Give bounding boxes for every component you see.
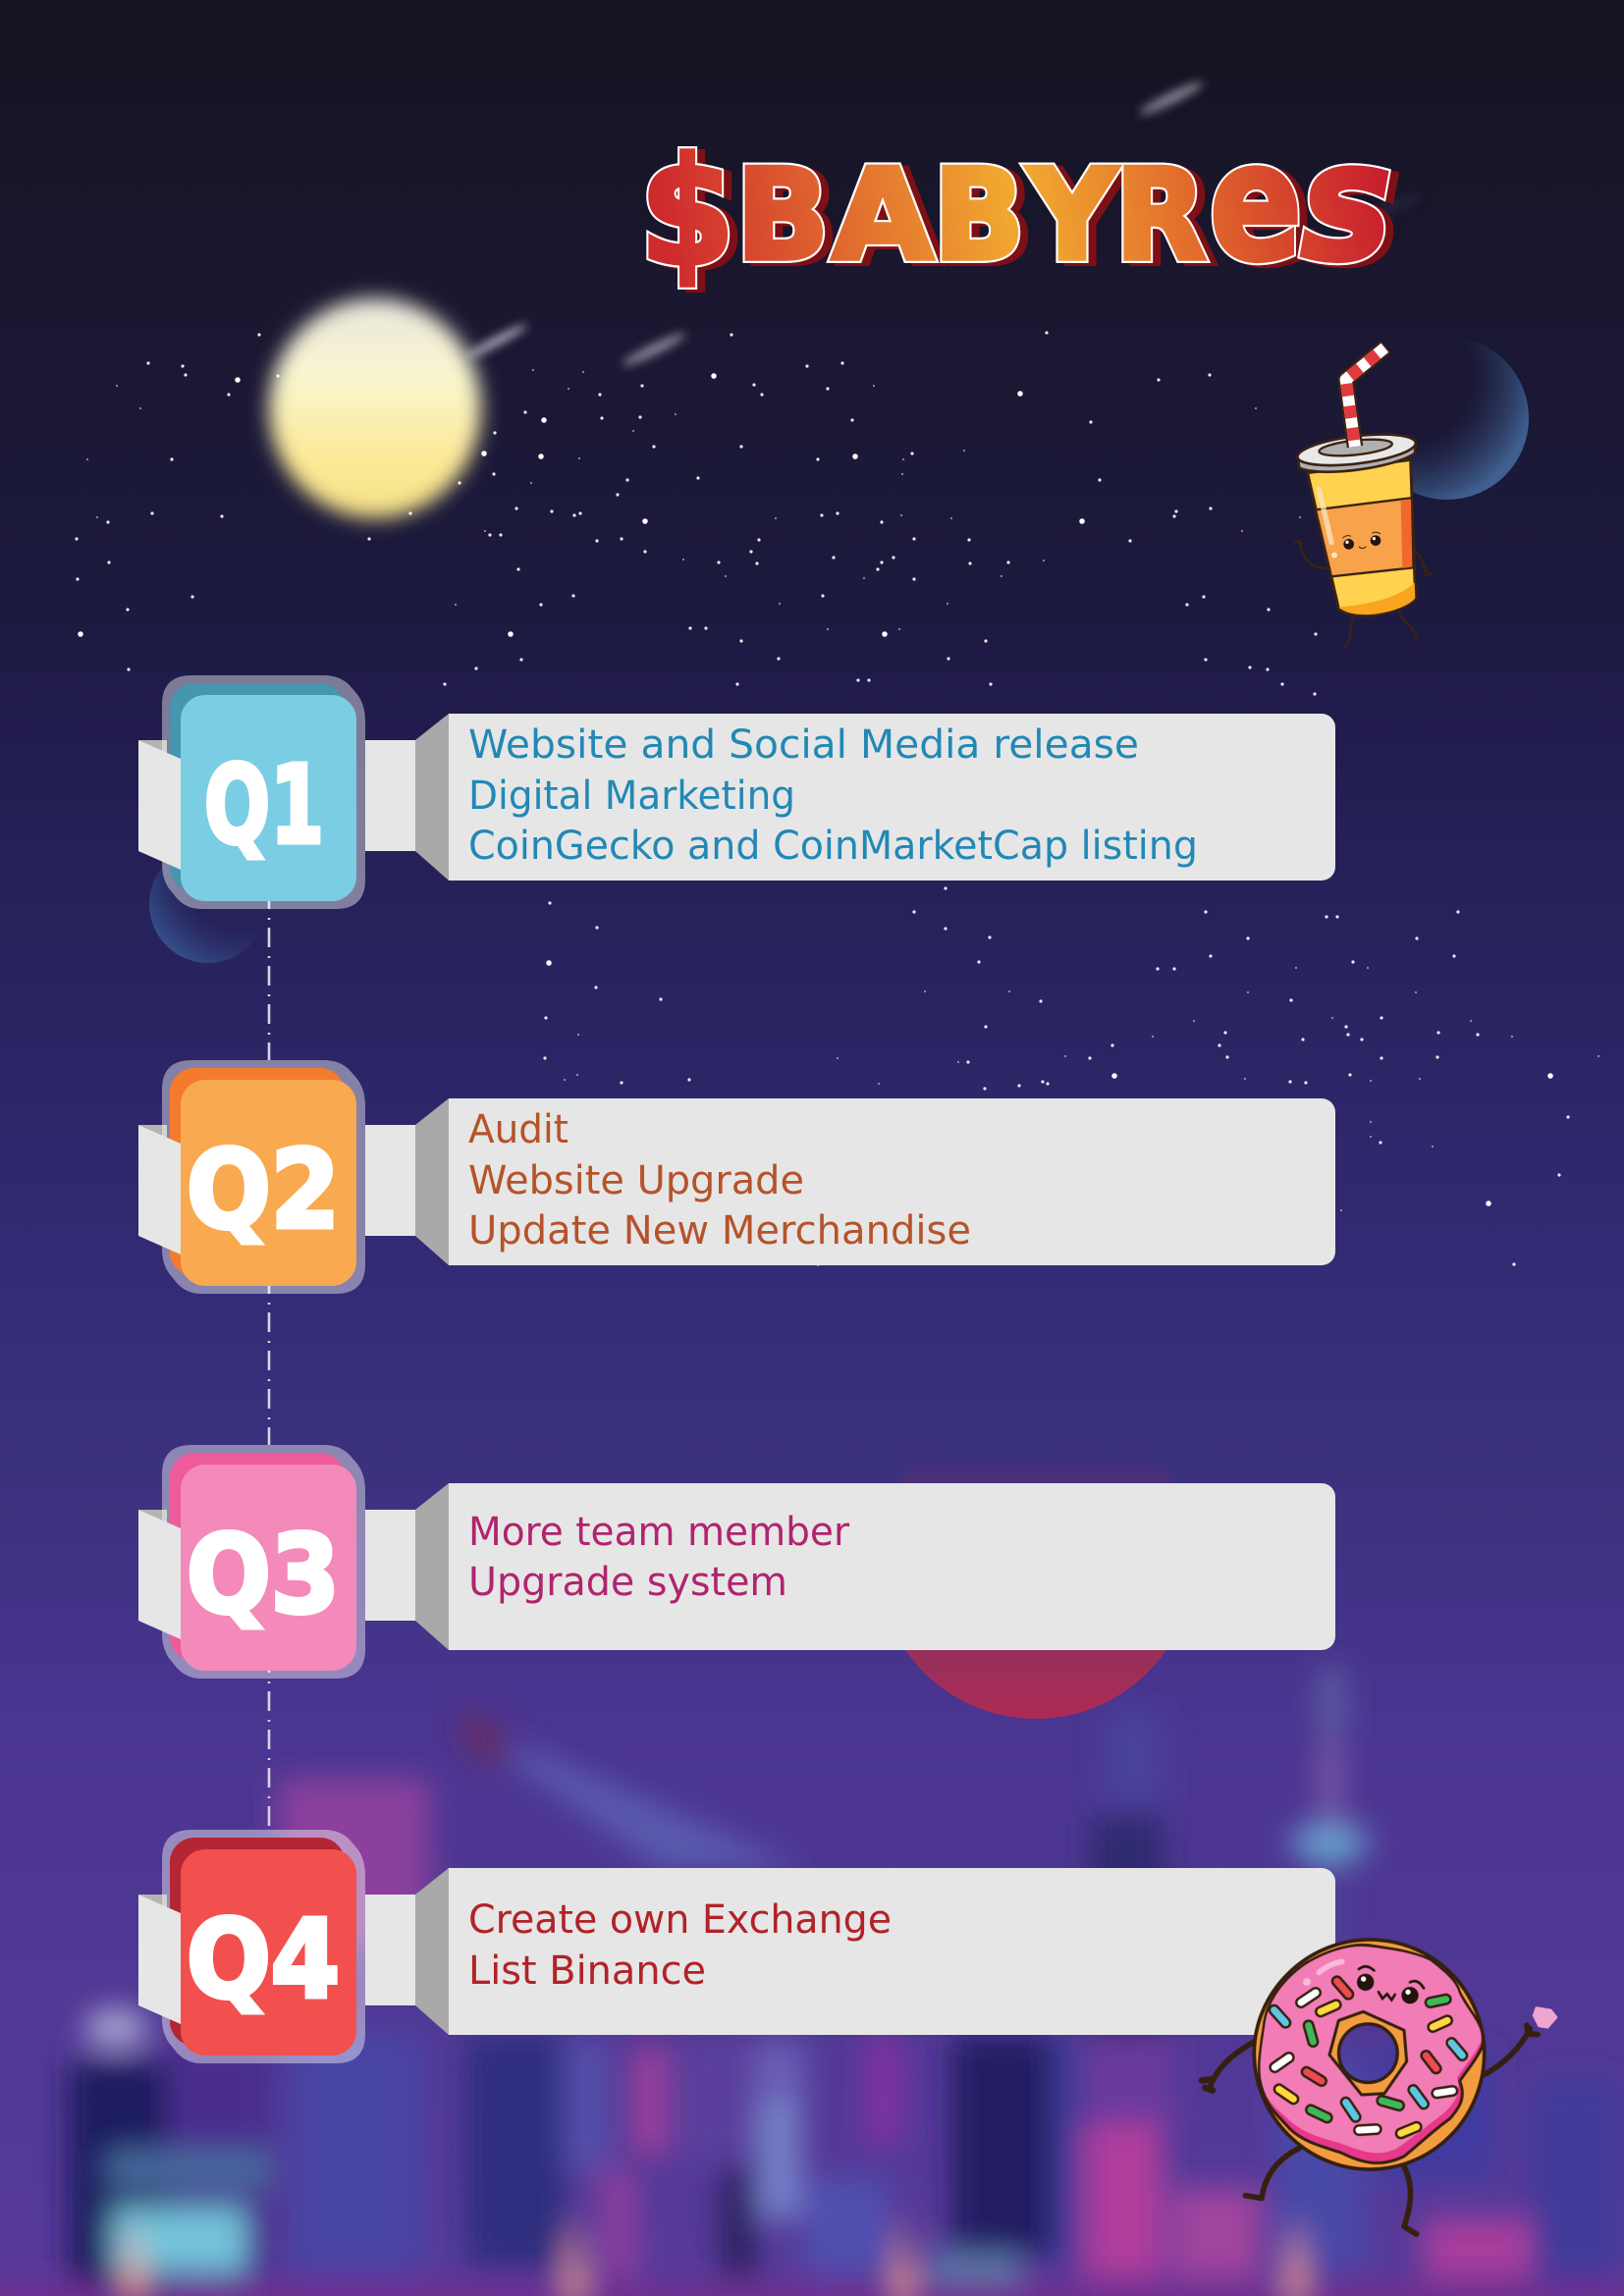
cup straw	[1346, 347, 1385, 447]
text Q3: More team member	[468, 1510, 850, 1555]
text Q1: CoinGecko and CoinMarketCap listing	[468, 824, 1198, 869]
left ribbon fold Q1	[138, 740, 167, 754]
text Q4	[468, 1897, 892, 1994]
tile border Q1	[162, 675, 365, 909]
cup side highlight	[1319, 489, 1331, 543]
donut icing shadow	[1259, 1945, 1483, 2163]
ribbon Q3	[138, 1510, 181, 1639]
text Q3: Upgrade system	[468, 1560, 787, 1605]
title gradient fill: R	[1115, 142, 1206, 288]
left ribbon fold Q2	[138, 1125, 167, 1139]
cup orange band	[1316, 498, 1413, 576]
donut hole rim	[1329, 2011, 1407, 2095]
title gradient fill: A	[833, 142, 933, 288]
tile back Q1	[170, 683, 345, 891]
text Q4: List Binance	[468, 1949, 706, 1994]
title white outline: B	[736, 142, 829, 288]
left ribbon fold Q3	[138, 1510, 167, 1523]
tile border Q2	[162, 1060, 365, 1294]
icon: drink cup mascot	[1295, 347, 1432, 647]
text Q1	[468, 722, 1198, 869]
donut face	[1303, 1961, 1424, 2003]
text Q2: Audit	[468, 1107, 568, 1152]
diamond	[1533, 2006, 1558, 2029]
moon	[269, 298, 481, 518]
cup bottom shade	[1338, 582, 1415, 614]
crescent planet right	[1366, 337, 1529, 500]
text Q1: Website and Social Media release	[468, 722, 1139, 768]
tile border Q3	[162, 1445, 365, 1679]
starfield	[77, 333, 1598, 1265]
text Q2	[468, 1107, 971, 1254]
tile front Q2	[181, 1080, 356, 1286]
title white outline: B	[934, 142, 1024, 288]
arrow connector Q1	[365, 714, 449, 881]
title white outline: $	[640, 128, 734, 298]
left ribbon fold Q4	[138, 1895, 167, 1908]
red planet behind Q3	[878, 1403, 1194, 1719]
cup band shade	[1401, 500, 1412, 568]
panel Q3	[449, 1483, 1335, 1650]
ribbon Q2	[138, 1125, 181, 1255]
crescent planet left	[149, 845, 267, 963]
tile back Q4	[170, 1838, 345, 2046]
icon: donut mascot	[1202, 1940, 1558, 2234]
connector line below Q1	[268, 901, 270, 1060]
cup body	[1308, 459, 1416, 615]
cup lid	[1298, 442, 1416, 472]
roadmap row Q4	[138, 1830, 1335, 2063]
arrow connector Q4	[365, 1868, 449, 2035]
title white outline: e	[1210, 109, 1302, 296]
title gradient fill: $	[640, 128, 734, 298]
title gradient fill: B	[934, 142, 1024, 288]
connector line below Q3	[268, 1671, 270, 1830]
arrow connector Q2	[365, 1098, 449, 1265]
title gradient fill: s	[1301, 109, 1391, 296]
title white outline: R	[1115, 142, 1206, 288]
title gradient fill	[640, 109, 1391, 298]
tile front Q3	[181, 1465, 356, 1671]
title white outline	[640, 109, 1391, 298]
connector line below Q2	[268, 1286, 270, 1445]
text Q3	[468, 1510, 850, 1605]
title gradient fill: Y	[1026, 142, 1118, 288]
cup arms and legs	[1295, 541, 1432, 647]
ribbon Q1	[138, 740, 181, 870]
text Q2: Update New Merchandise	[468, 1208, 971, 1254]
label Q2: Q2	[187, 1127, 340, 1253]
roadmap row Q2	[138, 1060, 1335, 1445]
arrow connector Q3	[365, 1483, 449, 1650]
meteor streaks	[462, 79, 1424, 369]
text Q4: Create own Exchange	[468, 1897, 892, 1943]
title gradient fill: B	[736, 142, 829, 288]
title	[640, 109, 1391, 298]
tile back Q2	[170, 1068, 345, 1276]
tile back Q3	[170, 1453, 345, 1661]
sprinkles	[1274, 1981, 1462, 2133]
title white outline: s	[1301, 109, 1391, 296]
title white outline: Y	[1026, 142, 1118, 288]
text Q1: Digital Marketing	[468, 774, 795, 819]
tile front Q1	[181, 695, 356, 901]
roadmap row Q1	[138, 675, 1335, 1060]
tile front Q4	[181, 1849, 356, 2056]
label Q4: Q4	[187, 1896, 340, 2022]
tile border Q4	[162, 1830, 365, 2063]
label Q1: Q1	[204, 742, 324, 868]
title white outline: A	[833, 142, 933, 288]
panel Q4	[449, 1868, 1335, 2035]
donut limbs	[1202, 2025, 1538, 2234]
donut base	[1254, 1940, 1485, 2169]
cup face	[1331, 532, 1380, 559]
roadmap row Q3	[138, 1445, 1335, 1830]
panel Q2	[449, 1098, 1335, 1265]
text Q2: Website Upgrade	[468, 1158, 804, 1203]
ribbon Q4	[138, 1895, 181, 2024]
label Q3: Q3	[187, 1512, 340, 1637]
donut icing	[1260, 1947, 1482, 2153]
title gradient fill: e	[1210, 109, 1302, 296]
blurred city skyline	[0, 1669, 1624, 2296]
panel Q1	[449, 714, 1335, 881]
